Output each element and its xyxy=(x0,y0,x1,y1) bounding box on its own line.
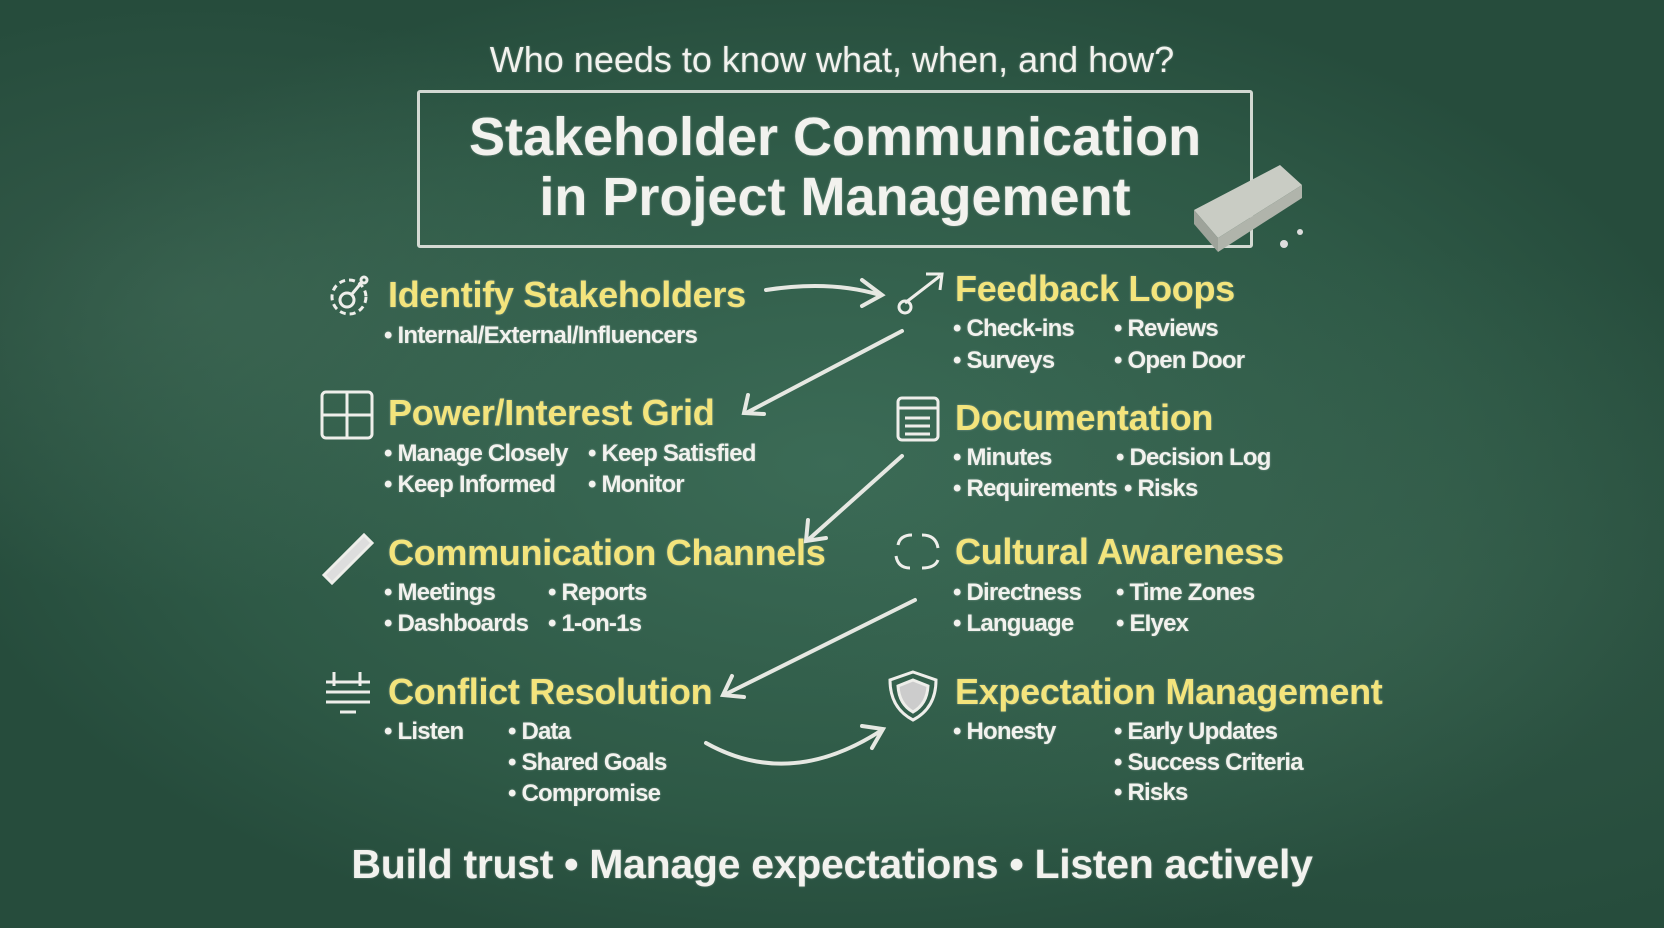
text: • 1-on-1s xyxy=(548,610,641,637)
text: Cultural Awareness xyxy=(955,531,1284,572)
title: Stakeholder Communication xyxy=(469,107,1201,167)
text: • Decision Log xyxy=(1116,444,1271,471)
text: • Success Criteria xyxy=(1114,749,1303,776)
title box xyxy=(417,90,1253,248)
icon: feedback arrow xyxy=(899,274,942,313)
icon: chalk xyxy=(324,535,372,583)
text: • Reports xyxy=(548,579,647,606)
text: • Monitor xyxy=(588,471,684,498)
text: • Keep Satisfied xyxy=(588,440,756,467)
icon: notepad xyxy=(898,398,938,440)
section: identify stakeholders xyxy=(384,274,746,349)
section: documentation xyxy=(952,397,1271,502)
text: Communication Channels xyxy=(388,532,825,573)
subtitle: Who needs to know what, when, and how? xyxy=(490,39,1174,80)
text: Feedback Loops xyxy=(955,268,1235,309)
icon: cycle xyxy=(896,535,938,568)
text: • Manage Closely xyxy=(384,440,568,467)
section: communication channels xyxy=(384,532,826,637)
icon: scales xyxy=(326,672,370,712)
section: conflict resolution xyxy=(384,671,712,807)
text: Identify Stakeholders xyxy=(388,274,746,315)
text: • Early Updates xyxy=(1114,718,1277,745)
text: • Time Zones xyxy=(1116,579,1254,606)
text: • Risks xyxy=(1114,779,1188,806)
title xyxy=(469,107,1201,227)
section: expectation management xyxy=(952,671,1384,806)
text: • Compromise xyxy=(508,780,660,807)
section: power/interest grid xyxy=(384,392,756,498)
text: • Risks xyxy=(1124,475,1198,502)
text: • Surveys xyxy=(953,347,1054,374)
text: Power/Interest Grid xyxy=(388,392,714,433)
text: • Open Door xyxy=(1114,347,1244,374)
icon: shield xyxy=(890,672,936,720)
title: in Project Management xyxy=(539,167,1131,227)
text: • Shared Goals xyxy=(508,749,667,776)
text: Expectation Management xyxy=(955,671,1382,712)
text: • Dashboards xyxy=(384,610,528,637)
section: feedback loops xyxy=(952,268,1246,374)
text: Documentation xyxy=(955,397,1213,438)
text: • Check-ins xyxy=(953,315,1074,342)
text: • Keep Informed xyxy=(384,471,555,498)
footer tagline: Build trust • Manage expectations • Listen actively xyxy=(351,841,1313,887)
text: • Requirements xyxy=(953,475,1117,502)
text: • Meetings xyxy=(384,579,495,606)
text: • Directness xyxy=(953,579,1081,606)
icon: gear xyxy=(332,277,367,314)
text: • Listen xyxy=(384,718,463,745)
text: • Minutes xyxy=(953,444,1052,471)
text: • Reviews xyxy=(1114,315,1218,342)
text: • Honesty xyxy=(953,718,1056,745)
section: cultural awareness xyxy=(952,531,1284,637)
text: • Data xyxy=(508,718,570,745)
icon: grid xyxy=(322,392,372,438)
text: Conflict Resolution xyxy=(388,671,712,712)
text: • Language xyxy=(953,610,1073,637)
text: • Internal/External/Influencers xyxy=(384,322,697,349)
text: • EIyex xyxy=(1116,610,1188,637)
